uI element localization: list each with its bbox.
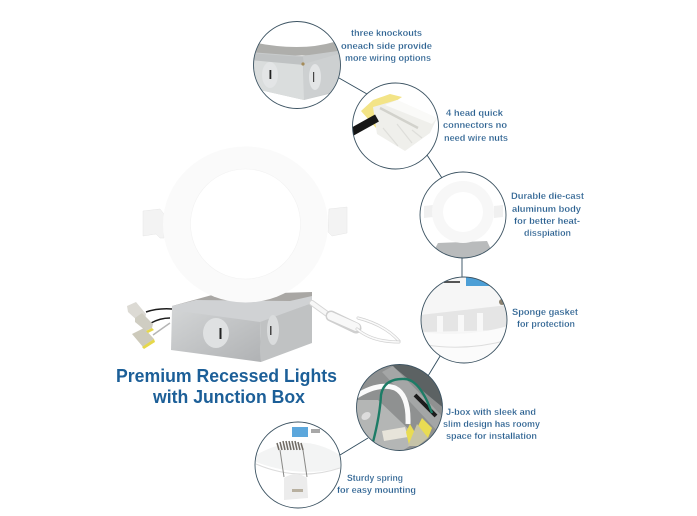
label: knockouts <box>341 28 432 63</box>
label: knockouts: more wiring options <box>345 53 431 63</box>
right mounting clip <box>328 207 347 236</box>
connector lines between detail circles <box>339 78 462 455</box>
label: die-cast body: Durable die-cast <box>511 191 584 201</box>
detail circle: quick connector <box>350 82 442 172</box>
label: J-box wiring: slim design has roomy <box>443 419 540 429</box>
detail circle: die-cast body <box>418 170 510 260</box>
junction box top <box>172 292 312 320</box>
junction box right face <box>260 303 312 362</box>
label: sturdy spring: for easy mounting <box>337 485 416 495</box>
label: die-cast body: aluminum body <box>512 204 581 214</box>
detail circle: sturdy spring <box>252 421 344 509</box>
quick connectors <box>127 302 155 349</box>
label: J-box wiring: J-box with sleek and <box>446 407 536 417</box>
junction box front face <box>171 309 261 362</box>
label: sturdy spring: Sturdy spring <box>347 473 403 483</box>
main product: recessed light with junction box <box>127 146 399 362</box>
junction box lid edge <box>172 296 312 322</box>
label: die-cast body: disspiation <box>524 228 571 238</box>
detail circle: J-box wiring <box>354 364 446 452</box>
label: quick connector: 4 head quick <box>446 108 504 118</box>
label: J-box wiring: space for installation <box>446 431 537 441</box>
detail circle: sponge gasket <box>418 275 510 365</box>
label: sponge gasket: Sponge gasket <box>512 307 578 317</box>
title: Premium Recessed Lights <box>116 366 337 386</box>
black and white wires <box>146 309 172 335</box>
label: sponge gasket: for protection <box>517 319 575 329</box>
round white trim ring <box>163 146 328 302</box>
label: knockouts: three knockouts <box>351 28 422 38</box>
detail circle: knockouts <box>250 20 345 110</box>
label: quick connector: need wire nuts <box>444 133 508 143</box>
label: sturdy spring <box>337 473 416 495</box>
label: die-cast body <box>511 191 584 238</box>
white power cable <box>312 303 399 342</box>
label: quick connector <box>443 108 508 143</box>
left mounting clip <box>143 209 164 238</box>
label: die-cast body: for better heat- <box>514 216 580 226</box>
title: with Junction Box <box>152 387 305 407</box>
label: sponge gasket <box>512 307 578 329</box>
label: quick connector: connectors no <box>443 120 508 130</box>
knockout: side <box>267 315 279 345</box>
label: J-box wiring <box>443 407 540 441</box>
title <box>116 366 337 407</box>
knockout: front <box>203 318 229 348</box>
label: knockouts: oneach side provide <box>341 41 432 51</box>
